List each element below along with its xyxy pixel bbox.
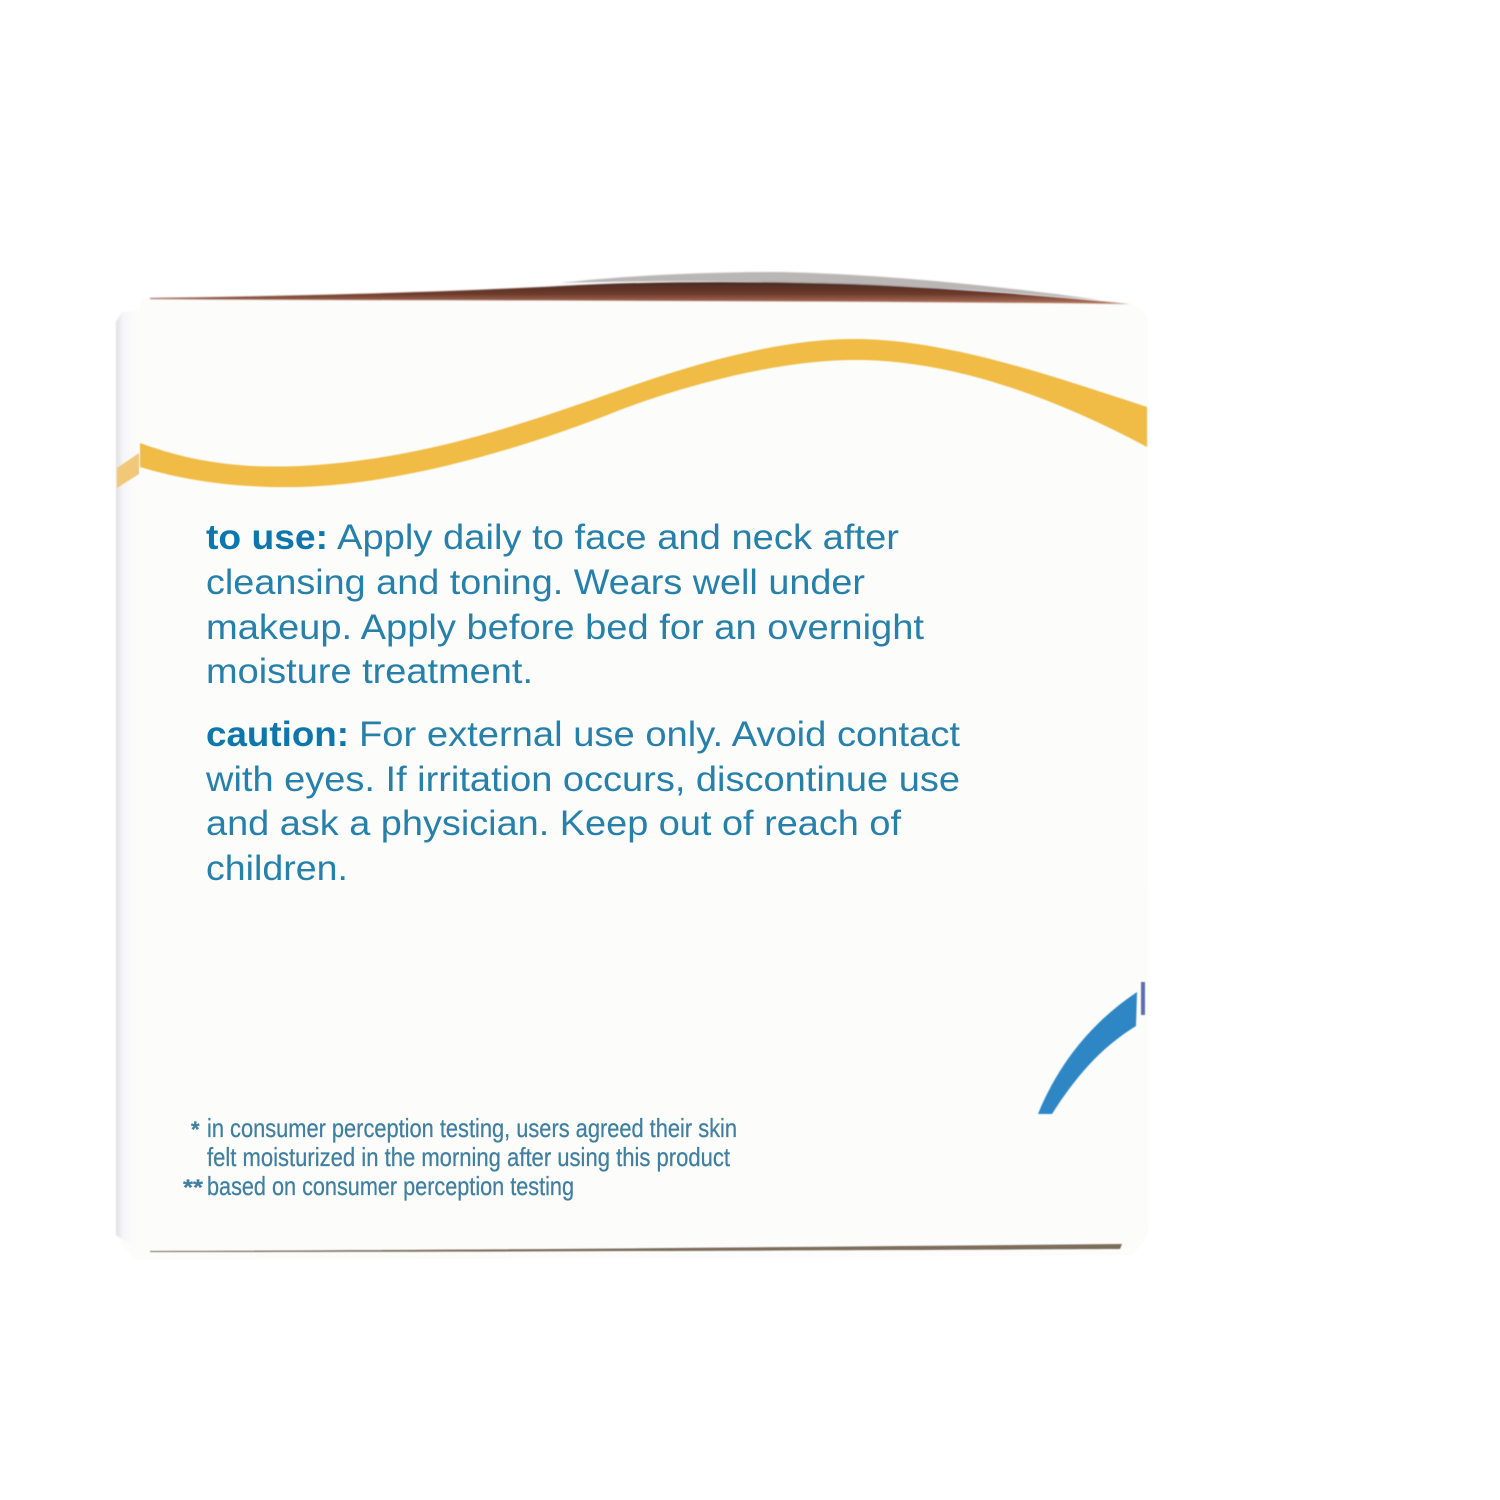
box top edge xyxy=(150,272,1130,304)
directions text: Apply daily to face and neck after xyxy=(337,518,899,557)
footnotes: based on consumer perception testing xyxy=(207,1171,574,1201)
footnotes: in consumer perception testing, users agreed their skin xyxy=(207,1113,737,1143)
bottom shadow edge xyxy=(150,1244,1122,1252)
directions text xyxy=(206,518,924,691)
yellow wave on side fold xyxy=(117,453,139,488)
footnotes: felt moisturized in the morning after using this product xyxy=(207,1142,731,1172)
footnotes xyxy=(183,1113,737,1201)
footnotes: * xyxy=(191,1117,200,1142)
left fold shading xyxy=(116,311,139,1250)
caution text xyxy=(205,715,960,888)
box front panel xyxy=(116,299,1149,1260)
directions text: to use: xyxy=(206,518,328,557)
caution text: with eyes. If irritation occurs, discontinue use xyxy=(205,760,960,799)
directions text: moisture treatment. xyxy=(206,652,533,691)
caution text: For external use only. Avoid contact xyxy=(359,715,960,754)
yellow wave band xyxy=(117,339,1147,488)
directions text: makeup. Apply before bed for an overnight xyxy=(206,608,924,647)
caution text: children. xyxy=(206,849,348,888)
footnotes: ** xyxy=(183,1175,204,1200)
caution text: caution: xyxy=(206,715,349,754)
caution text: and ask a physician. Keep out of reach of xyxy=(206,804,901,843)
directions text: cleansing and toning. Wears well under xyxy=(206,563,865,602)
blue wave fragment xyxy=(1038,982,1145,1114)
